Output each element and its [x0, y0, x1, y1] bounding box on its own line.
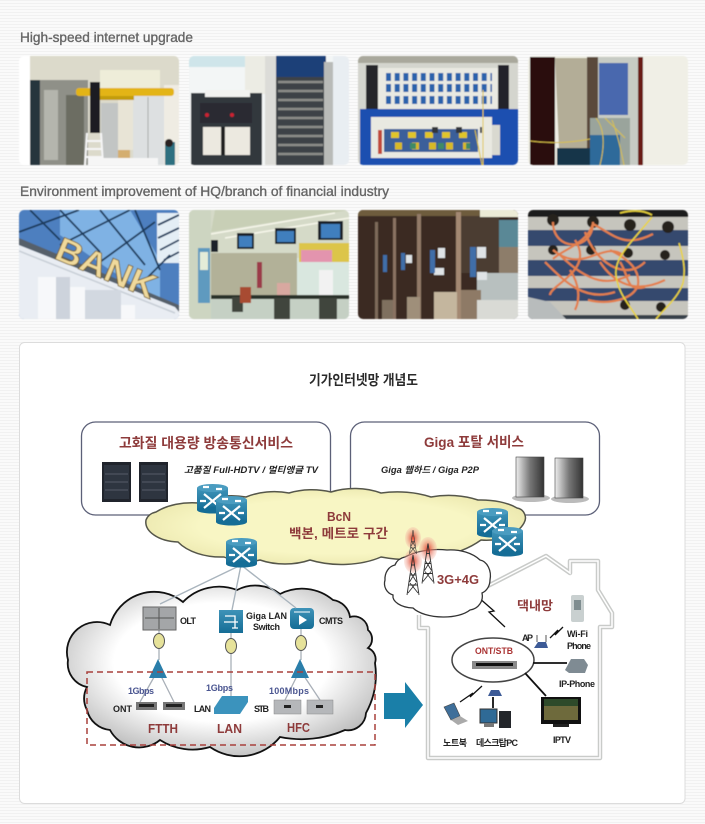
icon: broadcast servers: [102, 462, 168, 502]
AP: AP: [522, 633, 533, 643]
cloud: access network: [67, 586, 376, 756]
dashed subscriber boundary: [87, 672, 375, 745]
cloud: BcN backbone and metro: [146, 488, 525, 564]
speed labels: 1Gbps: [128, 686, 154, 696]
node: Giga LAN switch: Switch: [253, 622, 280, 632]
ONT/STB gateway: ONT/STB: [475, 646, 513, 657]
cloud: 3G+4G wireless: 3G+4G: [437, 572, 479, 587]
node: CMTS: [290, 608, 343, 629]
IPTV: [541, 697, 581, 745]
photo: ATM booths: [358, 210, 518, 319]
speed labels: [128, 683, 309, 696]
panel: gigabit internet network concept diagram: [20, 342, 685, 804]
box: high-quality broadcast service: 고화질 대용량 방송통신서비스: [119, 435, 293, 451]
photo: wall cabinet with blue box: [528, 56, 688, 165]
desktop PC and router: 데스크탑PC: [476, 737, 518, 748]
speed labels: 100Mbps: [269, 686, 309, 696]
diagram title: 기가인터넷망 개념도: [309, 372, 418, 388]
box: Giga portal service: Giga 웹하드 / Giga P2P: [381, 465, 480, 475]
photo row: financial industry: [19, 210, 688, 319]
photo: bank branch interior: [189, 210, 349, 319]
Wi-Fi phone: [567, 595, 591, 651]
access devices: [113, 696, 333, 714]
speed labels: 1Gbps: [206, 683, 233, 693]
cloud: BcN backbone and metro: 백본, 메트로 구간: [289, 526, 388, 541]
AP: [522, 633, 548, 648]
access type labels: [148, 720, 311, 736]
box: Giga portal service: [350, 422, 600, 515]
fibre coils: [154, 634, 306, 654]
house: home network: 댁내망: [517, 599, 554, 613]
Wi-Fi phone: Phone: [567, 641, 591, 651]
access type labels: HFC: [287, 720, 311, 735]
wireless bolts: [460, 597, 563, 702]
splitters: [149, 659, 309, 678]
desktop PC and router: [476, 690, 518, 748]
photo: equipment room with yellow cable tray: [19, 56, 179, 165]
notebook: 노트북: [443, 738, 467, 748]
access devices: STB: [254, 704, 270, 714]
box: high-quality broadcast service: 고품질 Full-HDTV / 멀티앵글 TV: [184, 465, 319, 475]
links from core router to access nodes: [160, 565, 296, 610]
Wi-Fi phone: Wi-Fi: [567, 629, 588, 639]
wired links: [493, 663, 567, 708]
node: CMTS: CMTS: [319, 616, 343, 626]
node: Giga LAN switch: Giga LAN: [246, 611, 287, 621]
photo: fibre optic cables: [528, 210, 688, 319]
access devices: ONT: [113, 704, 132, 714]
ONT/STB gateway: [452, 638, 534, 682]
IPTV: IPTV: [553, 735, 571, 745]
house: home network: [419, 556, 612, 758]
node: OLT: [143, 607, 196, 630]
icon: portal servers: [512, 457, 589, 503]
sign lettering: BANK: [50, 230, 163, 307]
photo: patch panel: [358, 56, 518, 165]
box: Giga portal service: Giga 포탈 서비스: [424, 434, 524, 450]
access devices: LAN: [194, 704, 211, 714]
heading: High-speed internet upgrade: High-speed internet upgrade: [20, 29, 193, 45]
node: Giga LAN switch: [219, 610, 287, 633]
access type labels: LAN: [217, 721, 242, 736]
arrow: access network to home: [384, 682, 423, 728]
photo: network racks: [189, 56, 349, 165]
cloud: 3G+4G wireless: [384, 527, 490, 617]
access type labels: FTTH: [148, 721, 178, 736]
node: OLT: OLT: [180, 616, 196, 626]
IP phone: IP-Phone: [559, 679, 595, 689]
vertical fibre lines: [140, 629, 320, 702]
IP phone: [559, 659, 595, 689]
box: high-quality broadcast service: [82, 422, 330, 515]
heading: Environment improvement: Environment improvement of HQ/branch of financial industry: [20, 183, 389, 199]
icons: radio towers: [404, 527, 437, 595]
cloud: BcN backbone and metro: BcN: [327, 509, 351, 524]
icons: backbone routers: [197, 484, 523, 568]
photo row: internet upgrade: [19, 56, 688, 165]
photo: bank building facade: [19, 210, 179, 319]
notebook: [443, 703, 468, 748]
